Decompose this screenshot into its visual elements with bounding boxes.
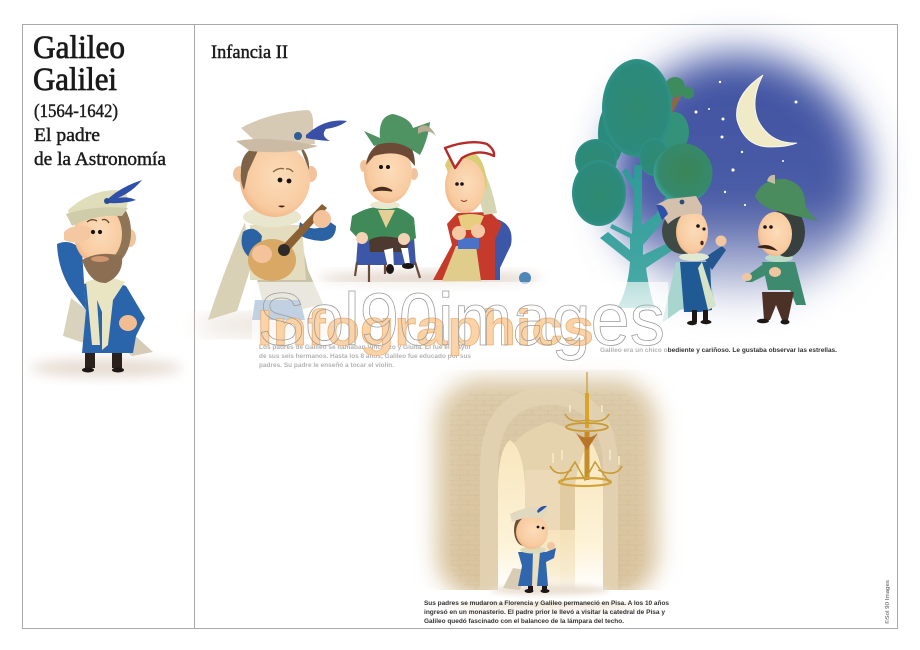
caption: family text: Los padres de Galileo se llamaban Vincenzo y Giulia. Él fue el mayor — [259, 343, 472, 351]
title: Galileo Galilei — [33, 30, 167, 170]
caption: family text: padres. Su padre le enseñó a tocar el violín. — [259, 362, 394, 369]
young Galileo talking — [656, 196, 726, 325]
father seated — [350, 114, 436, 282]
stars — [694, 81, 798, 206]
caption: cathedral text — [424, 600, 670, 625]
title: Galileo Galilei: de la Astronomía — [34, 149, 167, 170]
watermark overlay: Infographics — [257, 300, 594, 356]
caption: family text: de sus seis hermanos. Hasta los 8 años, Galileo fue educado por sus — [259, 353, 472, 360]
night sky — [610, 54, 866, 302]
arch — [480, 388, 618, 595]
illustration: Galileo's family with lute — [195, 110, 542, 334]
chandelier — [550, 372, 622, 486]
section heading: Infancia II: Infancia II — [211, 42, 288, 63]
caption: cathedral text: Galileo quedó fascinado con el balanceo de la lámpara del techo. — [424, 618, 624, 625]
illustration: night sky with tree and Galileo talking — [572, 54, 866, 325]
title: Galileo Galilei: Galilei — [33, 62, 117, 98]
ball — [519, 272, 531, 284]
mother seated — [433, 142, 512, 281]
caption: night sky text: Galileo era un chico obediente y cariñoso. Le gustaba observar las estrellas. — [600, 347, 837, 354]
moon — [737, 75, 797, 147]
tree — [572, 59, 712, 308]
credit: ©Sol 90 Images — [884, 580, 891, 624]
illustration: adult Galileo thinking — [30, 180, 182, 377]
caption: family text — [259, 343, 472, 369]
illustration: Pisa cathedral with chandelier — [410, 372, 680, 602]
caption: cathedral text: ingresó en un monasterio. El padre prior le llevó a visitar la catedral de Pisa y — [424, 609, 666, 616]
stone wall — [436, 378, 658, 600]
young Galileo with lute — [208, 110, 347, 320]
title: Galileo Galilei: Galileo — [33, 30, 125, 66]
caption: cathedral text: Sus padres se mudaron a Florencia y Galileo permaneció en Pisa. A los 10 años — [424, 600, 670, 607]
title: Galileo Galilei: El padre — [34, 125, 100, 146]
floor shadows — [195, 273, 542, 334]
title: Galileo Galilei: (1564-1642) — [34, 101, 118, 122]
watermark overlay: Sol90images — [258, 278, 665, 361]
young Galileo looking up — [503, 506, 556, 593]
father talking — [742, 175, 818, 324]
